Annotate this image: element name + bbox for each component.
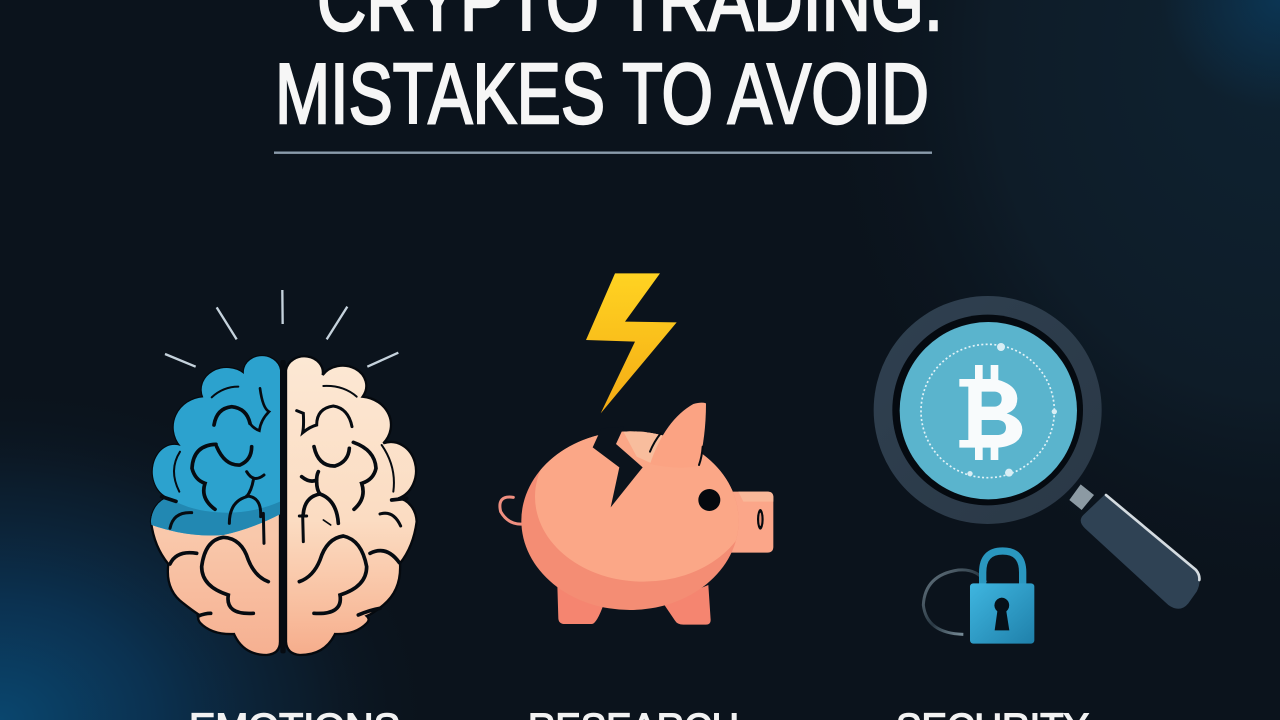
right hemisphere folds [297, 386, 407, 615]
ear [650, 403, 706, 468]
keyhole [994, 598, 1009, 630]
nostril [757, 509, 764, 530]
legs [557, 585, 711, 625]
left hemisphere [151, 356, 280, 655]
icon: cracked piggy bank [500, 403, 773, 625]
right hemisphere [286, 356, 417, 655]
handle [1069, 484, 1200, 609]
icon: brain [151, 290, 417, 655]
snout [727, 492, 773, 553]
tail [500, 497, 523, 524]
centre divide [280, 360, 286, 653]
node dots [967, 343, 1057, 477]
eye [698, 489, 720, 511]
lock body [970, 583, 1034, 644]
title: MISTAKES TO AVOID [275, 47, 929, 142]
lens ring [874, 296, 1102, 524]
crack [593, 427, 643, 507]
radiating lines [165, 290, 398, 367]
title underline [274, 152, 932, 154]
motion arc [923, 570, 986, 634]
left hemisphere folds [162, 387, 269, 616]
body [521, 431, 736, 610]
shackle [983, 551, 1023, 585]
title [275, 0, 943, 142]
snout top [738, 492, 773, 502]
icon: padlock [923, 551, 1034, 644]
icon: magnifying glass with bitcoin [874, 296, 1200, 609]
lens [900, 322, 1077, 499]
bitcoin symbol [959, 365, 1022, 460]
icon: lightning bolt [586, 273, 677, 413]
